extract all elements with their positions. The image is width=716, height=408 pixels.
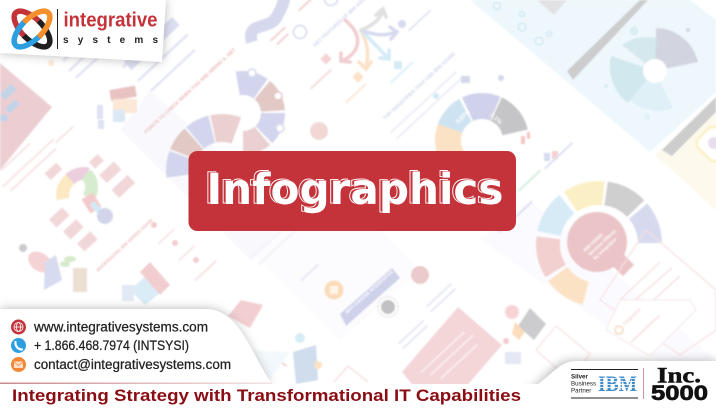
heading bar: why choose integrative: WHY CHOOSE INTEGRATIVE xyxy=(344,269,394,315)
illustration: person with plant xyxy=(19,244,87,292)
IBM silver business partner badge: Partner xyxy=(571,388,591,394)
tagline: Integrating Strategy with Transformational IT Capabilities xyxy=(12,386,521,405)
illustration: woman with pink hair xyxy=(503,305,521,364)
text block: left diagonal copy xyxy=(0,126,74,191)
shadow under footer shapes xyxy=(0,309,716,400)
heading bar: challenges xyxy=(662,97,716,156)
panel: light blue infographic xyxy=(470,0,716,152)
icon: integrative swoosh mark xyxy=(8,5,56,53)
chart: upper half of S-shaped wheel xyxy=(201,71,285,155)
heading bar: purple label top left xyxy=(124,17,180,70)
footer panel: partner logos xyxy=(500,361,716,408)
chart: industries donut xyxy=(436,94,528,186)
labels: donut percentages xyxy=(455,109,503,127)
labels: donut percentages: 3.87% xyxy=(455,109,472,125)
outline: frame bottom centre xyxy=(334,366,368,382)
red pill background xyxy=(188,151,516,231)
arrows: five curved feature arrows xyxy=(341,9,397,69)
heading bar: top gray card xyxy=(537,0,567,15)
chart: lower half of S-shaped wheel xyxy=(163,111,281,229)
logo divider xyxy=(57,9,58,49)
red rule xyxy=(0,382,272,384)
white strip xyxy=(0,384,560,408)
text block: middle copy lines xyxy=(250,224,296,265)
icon: light bulb with title: IBM AS/400 xyxy=(582,232,604,253)
chart: blue sector diagram xyxy=(604,26,698,120)
icon: envelope xyxy=(11,357,26,372)
IBM silver business partner badge xyxy=(571,369,639,398)
icon: yellow rounded badge xyxy=(693,123,716,165)
icon: globe xyxy=(11,320,26,334)
icon: purple milestone circle xyxy=(294,26,306,38)
icon: phone xyxy=(11,338,26,353)
heading: top industries: TOP INDUSTRIES THAT USE IBM AS/400 xyxy=(382,51,457,121)
heading: API development checklist: POINTS TO CHECK WHEN YOU ARE HIRING A .NET xyxy=(143,47,237,135)
text block: industries copy xyxy=(390,71,463,139)
website address: www.integrativesystems.com xyxy=(33,320,208,334)
icon: top circle xyxy=(324,0,338,6)
card: red tag behind footer xyxy=(228,300,263,328)
panel: outlined note bottom right xyxy=(600,230,716,355)
white card xyxy=(0,0,166,62)
bottom tagline strip xyxy=(0,382,560,408)
icon: winding road xyxy=(251,0,285,42)
legend: country bars xyxy=(498,132,573,233)
wordmark: integrative: integrative xyxy=(64,10,158,32)
title: Infographics: Infographics xyxy=(206,165,504,215)
white partner panel shape xyxy=(500,361,716,408)
illustration: phone and devices xyxy=(240,333,322,384)
panel: diagonal background bands xyxy=(120,90,716,400)
IBM silver business partner badge: IBM xyxy=(598,371,637,396)
card: mini logo card xyxy=(606,300,696,356)
icon: gray step circle xyxy=(378,297,398,317)
card: outlined frame xyxy=(536,326,590,380)
labels: donut percentages: 3.1% xyxy=(489,112,503,127)
text block: feature labels xyxy=(310,10,431,103)
card: gray and orange tile xyxy=(512,308,546,340)
email address: contact@integrativesystems.com xyxy=(34,357,231,372)
Inc. 5000 logo xyxy=(651,362,708,405)
phone number: + 1.866.468.7974 (INTSYSI) xyxy=(34,338,189,353)
icon: red step circle xyxy=(411,266,429,284)
text block: top left copy xyxy=(62,20,196,92)
Inc. 5000 logo: 5000 xyxy=(651,382,708,405)
shadow under logo card xyxy=(0,0,166,62)
heading bar: why choose integrative xyxy=(340,268,400,326)
icon: light bulb with title: Services Offered xyxy=(587,229,617,257)
wordmark: systems: systems xyxy=(63,35,158,46)
IBM silver business partner badge: Business xyxy=(571,380,596,388)
title: Infographics: Infographics xyxy=(204,164,501,214)
text block: step notes xyxy=(300,264,456,349)
icon: question mark dot xyxy=(97,208,113,224)
question mark chart xyxy=(63,174,102,214)
icon: wheel badges xyxy=(248,69,328,140)
Inc. 5000 logo: Inc. xyxy=(657,362,701,388)
icon: blue illustration on red block xyxy=(0,84,20,122)
title pill xyxy=(188,151,516,231)
divider xyxy=(643,368,644,399)
text block: red notes near the road xyxy=(270,0,314,45)
panel: dark red block on the left xyxy=(0,63,52,170)
text block: conclusion lines xyxy=(420,331,478,379)
icon: orange step circle xyxy=(324,280,344,300)
chart: bulb wheel segments xyxy=(527,172,671,316)
heading: benefits of modernizing: MODERNIZING IBM SERIES AS/400 xyxy=(95,217,154,273)
panel: pink conclusion card xyxy=(402,307,502,388)
icon: feature squares xyxy=(320,20,406,83)
white contact panel shape xyxy=(0,309,272,384)
panel: cream infographic xyxy=(655,100,716,210)
icon: benefit dots and notes xyxy=(151,222,217,281)
footer panel: contact details xyxy=(0,309,272,384)
icon: light bulb with title: By Integrative xyxy=(592,236,618,261)
icon: industry glyphs xyxy=(433,75,504,99)
illustration: server stack xyxy=(122,262,170,305)
labels: pink question tags xyxy=(44,154,135,252)
icon: light bulb with title xyxy=(567,212,634,276)
card: mini logo card: integrative xyxy=(621,307,642,327)
logo card xyxy=(0,0,166,62)
IBM silver business partner badge: Silver xyxy=(571,374,588,380)
icon: desk illustration xyxy=(48,60,137,129)
heading bar: reasons to hire xyxy=(567,0,648,80)
icon: blue panel step glyphs xyxy=(494,2,552,45)
